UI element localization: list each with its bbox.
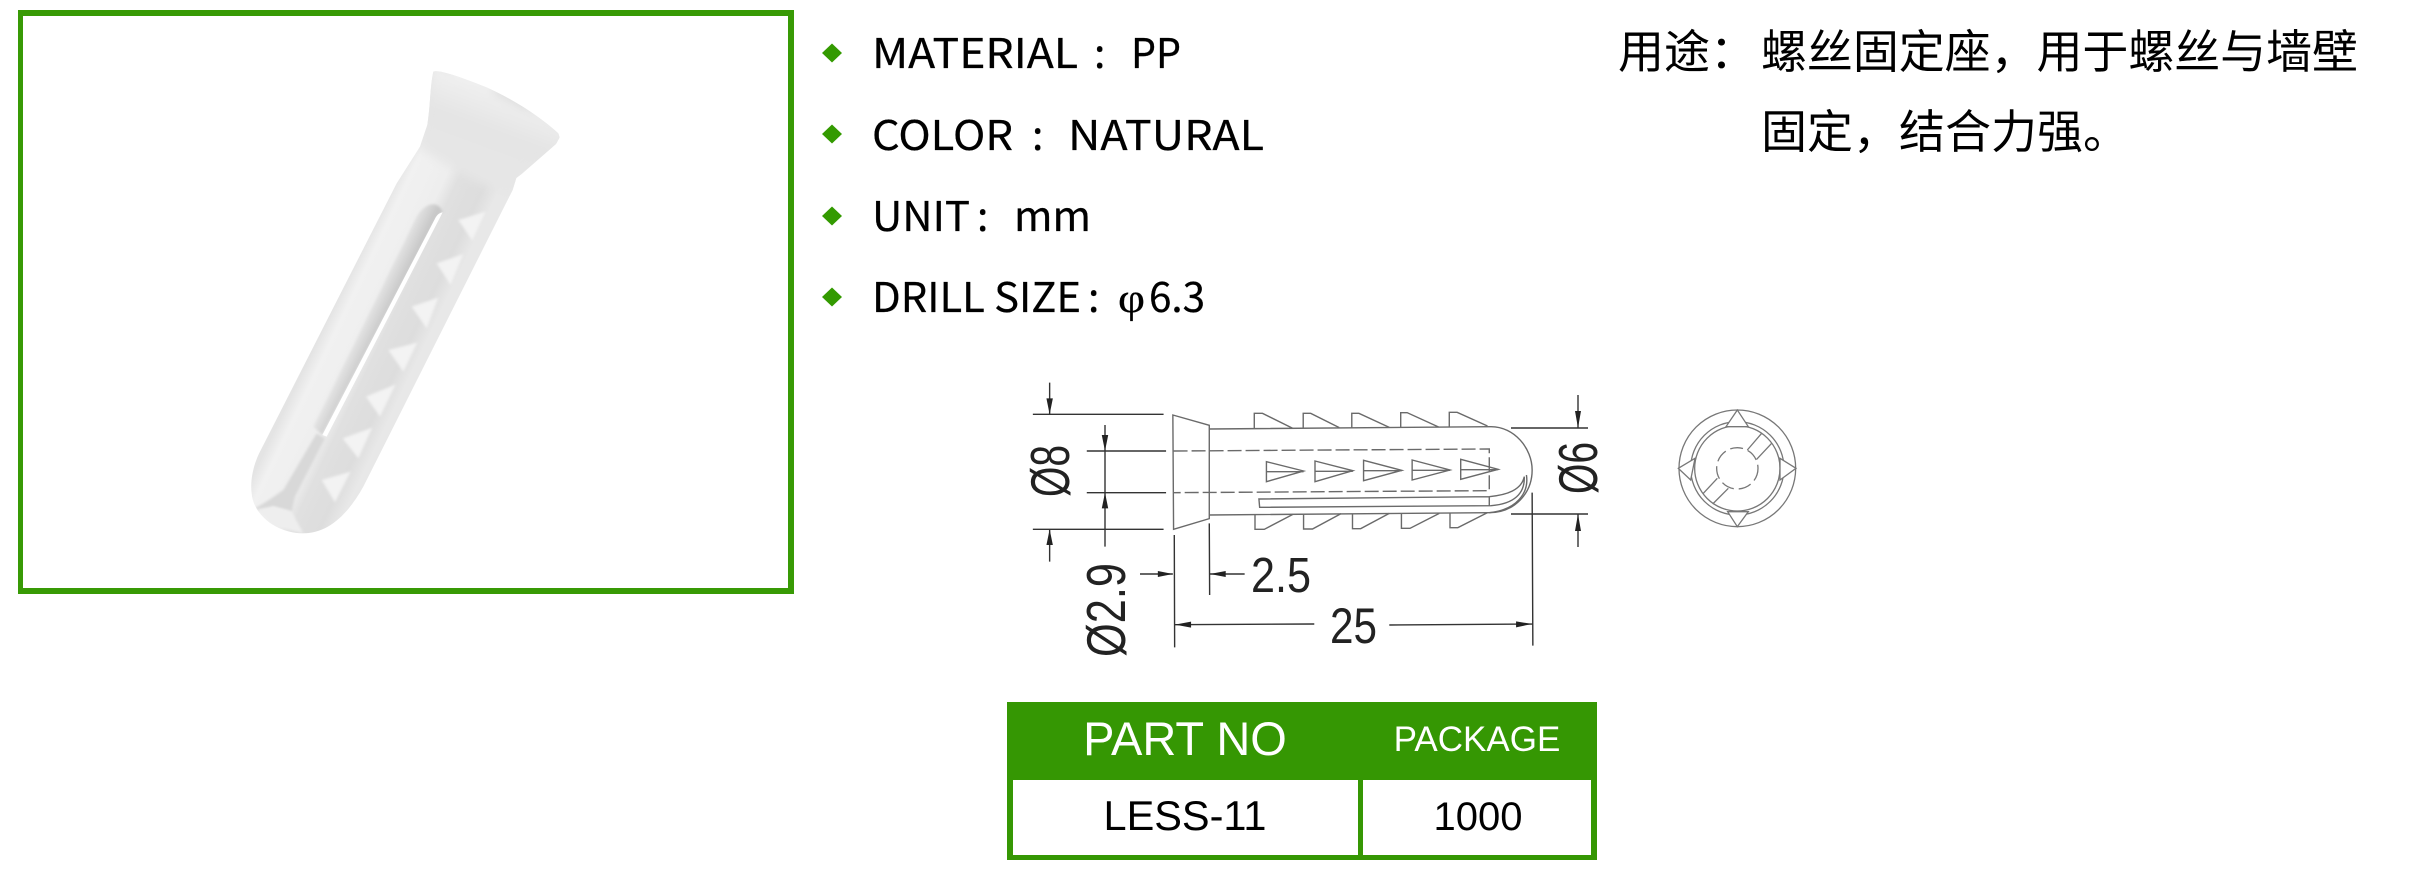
plug body outline [1209, 427, 1532, 515]
right dimension arrowheads [1575, 411, 1581, 531]
spec: unit: : [977, 183, 988, 243]
table background [1007, 702, 1597, 860]
plug body [251, 71, 541, 534]
slit outline [1259, 475, 1527, 513]
right dimension lines [1511, 395, 1588, 547]
slot shadow wall [313, 204, 443, 435]
spec: color: : [1032, 102, 1043, 162]
spec: color [822, 102, 1264, 162]
hidden bore dashed lines [1174, 449, 1489, 493]
header: package: PACKAGE [1394, 720, 1560, 759]
bottom barbs [1255, 513, 1487, 529]
spec: unit: UNIT [872, 183, 970, 243]
specification list [822, 20, 1264, 324]
dimension lines [1033, 383, 1533, 647]
spec: unit [822, 183, 1091, 243]
usage description in Chinese: 固定，结合力强。 [1761, 106, 2129, 158]
product photo: white plastic wall plug [251, 71, 560, 534]
centre barb triangles [1266, 459, 1498, 482]
webs [1703, 433, 1772, 504]
dimension label: 25: 25 [1330, 598, 1377, 654]
usage description in Chinese [1618, 26, 2358, 158]
technical end-view drawing [1678, 410, 1796, 527]
dimension label: diameter 8: Ø8 [1019, 445, 1081, 497]
dimension label: 2.5: 2.5 [1251, 549, 1311, 603]
value: part number: LESS-11 [1103, 792, 1267, 839]
top barbs [1254, 412, 1487, 429]
lower groove [255, 433, 325, 512]
cell: package [1363, 780, 1591, 855]
spec: material: MATERIAL [872, 20, 1078, 80]
technical side-view drawing [1019, 383, 1609, 657]
spec: drill size: : [1088, 264, 1099, 324]
usage description in Chinese: 螺丝固定座，用于螺丝与墙壁 [1761, 26, 2358, 78]
spec: drill size: φ [1118, 275, 1145, 321]
spec: color: NATURAL [1068, 102, 1264, 162]
part number table [1007, 702, 1597, 860]
spec: material [822, 20, 1181, 80]
four barbs [1678, 410, 1796, 527]
dimension label: diameter 2.9: Ø2.9 [1075, 563, 1137, 657]
spec: drill size: DRILL SIZE [872, 264, 1081, 324]
dimension arrowheads [1046, 398, 1532, 628]
header: part no: PART NO [1083, 712, 1287, 765]
rounded tip wedge [260, 508, 302, 532]
plug head outline [1173, 415, 1209, 529]
outlines and dimension lines [1033, 383, 1533, 647]
spec: unit: mm [1014, 183, 1091, 243]
inner dashed bore [1717, 448, 1758, 489]
usage description in Chinese: 用途： [1618, 26, 1756, 78]
spec: material: : [1094, 20, 1105, 80]
photo frame panel [18, 10, 794, 594]
spec: material: PP [1131, 20, 1181, 80]
plug flared head [424, 72, 526, 180]
cell: part number [1013, 780, 1358, 855]
barb highlights [322, 212, 486, 502]
value: package: 1000 [1434, 795, 1522, 839]
spec: drill size: 6.3 [1149, 264, 1205, 324]
spec: drill size [822, 264, 1205, 324]
dimension label: diameter 6: Ø6 [1547, 442, 1609, 494]
slot white opening [322, 212, 443, 437]
rings [1679, 410, 1796, 527]
spec: color: COLOR [872, 102, 1013, 162]
